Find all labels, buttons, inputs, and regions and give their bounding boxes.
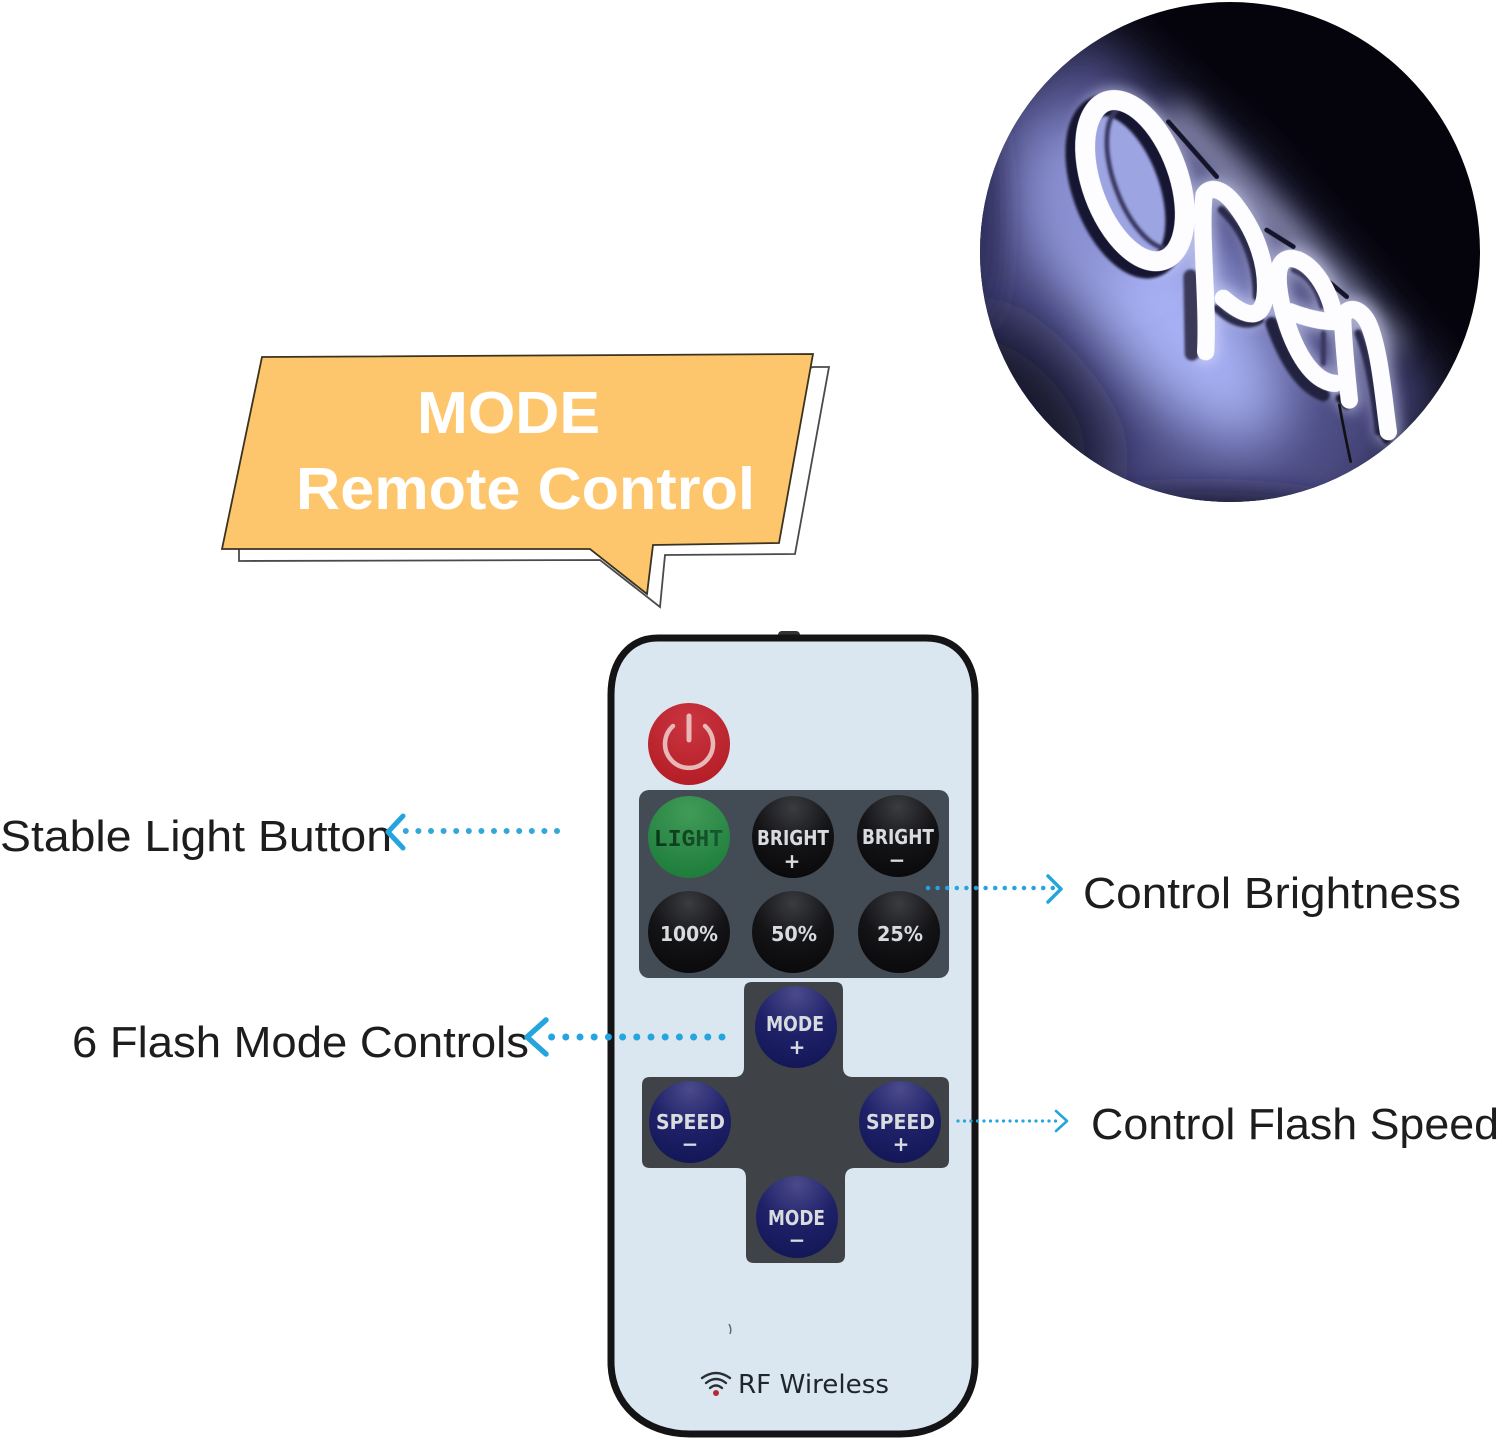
button: bright plus: + — [784, 849, 800, 873]
bubble orange front shape — [222, 354, 813, 594]
photo: open neon sign in circle — [980, 2, 1480, 502]
button: mode minus: − — [789, 1228, 805, 1252]
mounting rail — [1168, 122, 1347, 297]
button: speed plus — [859, 1081, 941, 1163]
button: light: LIGHT — [654, 827, 723, 854]
callout: control flash speed — [958, 1100, 1499, 1149]
button: speed minus: SPEED — [656, 1110, 725, 1134]
letter shadows — [1056, 92, 1387, 440]
remote body — [611, 638, 975, 1434]
button: speed plus: + — [893, 1132, 909, 1156]
button: 100 percent: 100% — [660, 922, 718, 946]
label text: Control Flash Speed — [1091, 1100, 1499, 1149]
button: speed plus: SPEED — [866, 1110, 935, 1134]
mode and speed button panel — [642, 982, 949, 1263]
arrow: points right — [958, 1111, 1067, 1131]
button: 25 percent — [858, 891, 940, 973]
button: speed minus: − — [682, 1132, 698, 1156]
glow on upper wall — [1170, 110, 1395, 350]
callout: control brightness — [928, 869, 1461, 918]
label text: Control Brightness — [1083, 869, 1461, 918]
button: light — [648, 796, 730, 878]
button: mode plus: MODE — [766, 1012, 824, 1036]
callout: stable light button — [0, 812, 557, 861]
button: bright plus: BRIGHT — [757, 826, 829, 850]
button: 50 percent — [752, 891, 834, 973]
button: mode minus — [756, 1176, 838, 1258]
button: speed minus — [649, 1081, 731, 1163]
inner hole light — [1096, 116, 1166, 251]
button: mode plus — [755, 986, 837, 1068]
neon tubes — [1074, 90, 1194, 272]
button: bright minus: − — [889, 848, 905, 872]
button: 50 percent: 50% — [771, 922, 817, 946]
arrow: points right — [928, 876, 1061, 902]
remote top nub — [778, 631, 800, 639]
label text: 6 Flash Mode Controls — [72, 1018, 529, 1067]
button: bright minus — [857, 795, 939, 877]
RF wireless logo — [702, 1370, 889, 1400]
button: bright plus — [752, 796, 834, 878]
button: mode plus: + — [789, 1035, 805, 1059]
speech bubble title — [222, 354, 829, 607]
power button — [648, 703, 730, 785]
brightness button panel — [639, 790, 949, 978]
neon letters — [1056, 87, 1388, 462]
power wire — [1339, 405, 1351, 462]
button: 25 percent: 25% — [877, 922, 923, 946]
button: mode minus: MODE — [768, 1206, 825, 1230]
bubble white back shape — [239, 367, 829, 607]
neon halo — [1065, 87, 1388, 432]
icon: wifi signal — [702, 1373, 730, 1396]
bubble heading: Remote Control — [296, 456, 755, 522]
bubble heading — [296, 380, 755, 522]
remote control — [611, 631, 975, 1434]
arrow: points left — [527, 1020, 722, 1054]
RF wireless text: RF Wireless — [738, 1370, 889, 1400]
bubble heading: MODE — [417, 380, 600, 446]
button: 100 percent — [648, 891, 730, 973]
arrow: points left — [388, 816, 557, 848]
callout: flash mode controls — [72, 1018, 722, 1067]
label text: Stable Light Button — [0, 812, 392, 861]
small speck mark — [729, 1324, 731, 1334]
button: bright minus: BRIGHT — [862, 825, 934, 849]
